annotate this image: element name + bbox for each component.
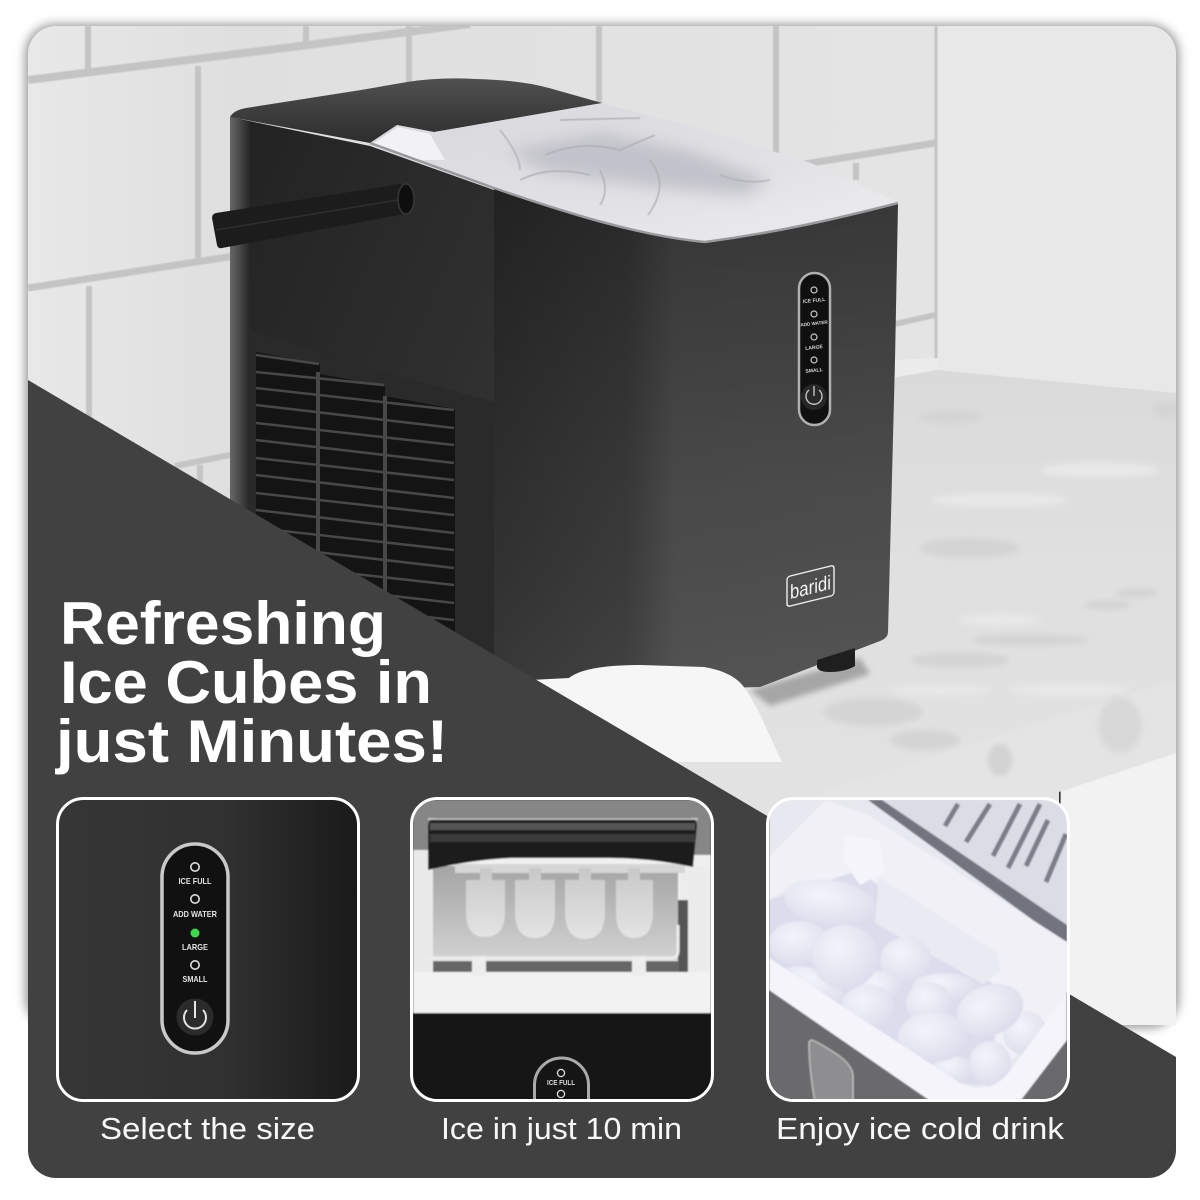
title: Ice Cubes in [60, 649, 432, 716]
white interior wall [1032, 920, 1067, 946]
mini panel: ICE FULL [547, 1080, 576, 1087]
grey body right [1021, 1040, 1067, 1100]
open black lid [428, 818, 698, 870]
caption: select the size: Select the size [100, 1111, 315, 1146]
white inner block [852, 870, 870, 885]
control panel on machine: SMALL [805, 367, 823, 375]
wall skirt [895, 358, 938, 376]
counter front edge [1059, 791, 1060, 792]
lid inner tint [505, 132, 770, 196]
lid left highlight [374, 127, 445, 160]
control pill: SMALL [182, 974, 208, 984]
cabinet gap [1059, 792, 1061, 804]
panel: enjoy ice cold drink photo [768, 798, 1068, 1102]
control panel on machine: ADD WATER [800, 320, 829, 327]
caption: ice in just 10 min: Ice in just 10 min [441, 1111, 682, 1146]
control panel on machine: LARGE [805, 344, 824, 352]
caption: enjoy ice cold drink: Enjoy ice cold drink [776, 1111, 1065, 1146]
mini panel [533, 1056, 590, 1099]
machine feet [817, 648, 855, 672]
white front rim [769, 958, 1067, 1100]
ice divider ridge [876, 887, 987, 984]
lid front rim [370, 143, 898, 242]
title [55, 590, 448, 775]
vent grille [256, 352, 455, 650]
water tank [433, 866, 678, 960]
raised lid with slots [868, 800, 1067, 945]
countertop [894, 370, 1176, 792]
counter mottling [825, 540, 1154, 776]
pipe [423, 925, 678, 958]
white side columns [413, 849, 430, 856]
black top lid [230, 78, 602, 143]
machine front body [494, 188, 898, 710]
lid veins [500, 118, 770, 215]
panel: select the size photo [58, 798, 358, 1100]
handle [212, 184, 414, 248]
control panel on machine [799, 273, 830, 425]
dark band [433, 961, 679, 972]
title: Refreshing [60, 590, 386, 657]
dark opening right [678, 900, 688, 972]
panel: ice in 10 minutes photo [412, 798, 712, 1128]
background above lid [413, 800, 711, 855]
control pill: LARGE [182, 942, 208, 952]
control pill [162, 844, 228, 1053]
front shading [494, 188, 898, 710]
power button [176, 998, 214, 1036]
control panel on machine: ICE FULL [803, 297, 826, 305]
green indicator light [190, 928, 200, 938]
clear lid [370, 103, 898, 242]
control pill: ICE FULL [178, 876, 212, 886]
clips [470, 960, 488, 973]
shadow under machine [750, 658, 870, 706]
interior floor shade [769, 870, 1000, 1086]
tile wall [28, 26, 1176, 804]
tank top strip [455, 864, 685, 873]
black lower body [413, 1013, 711, 1103]
ice maker machine [212, 78, 898, 720]
right wall panel [1150, 26, 1176, 52]
machine side body [230, 117, 494, 720]
title: just Minutes! [55, 708, 448, 775]
vent recess [250, 330, 494, 660]
white tray [414, 974, 415, 975]
grey body left [769, 990, 929, 1100]
ice cubes [769, 874, 1047, 1085]
control pill: ADD WATER [173, 909, 217, 919]
cabinet below counter [1060, 740, 1176, 1030]
ice scoop [530, 665, 782, 762]
ice fingers [466, 868, 653, 939]
baridi logo: baridi [790, 572, 831, 604]
machine left highlight strip [230, 117, 250, 560]
tile grout lines [28, 24, 936, 490]
dark diagonal panel [28, 380, 1176, 1178]
small control panel [809, 1040, 853, 1102]
